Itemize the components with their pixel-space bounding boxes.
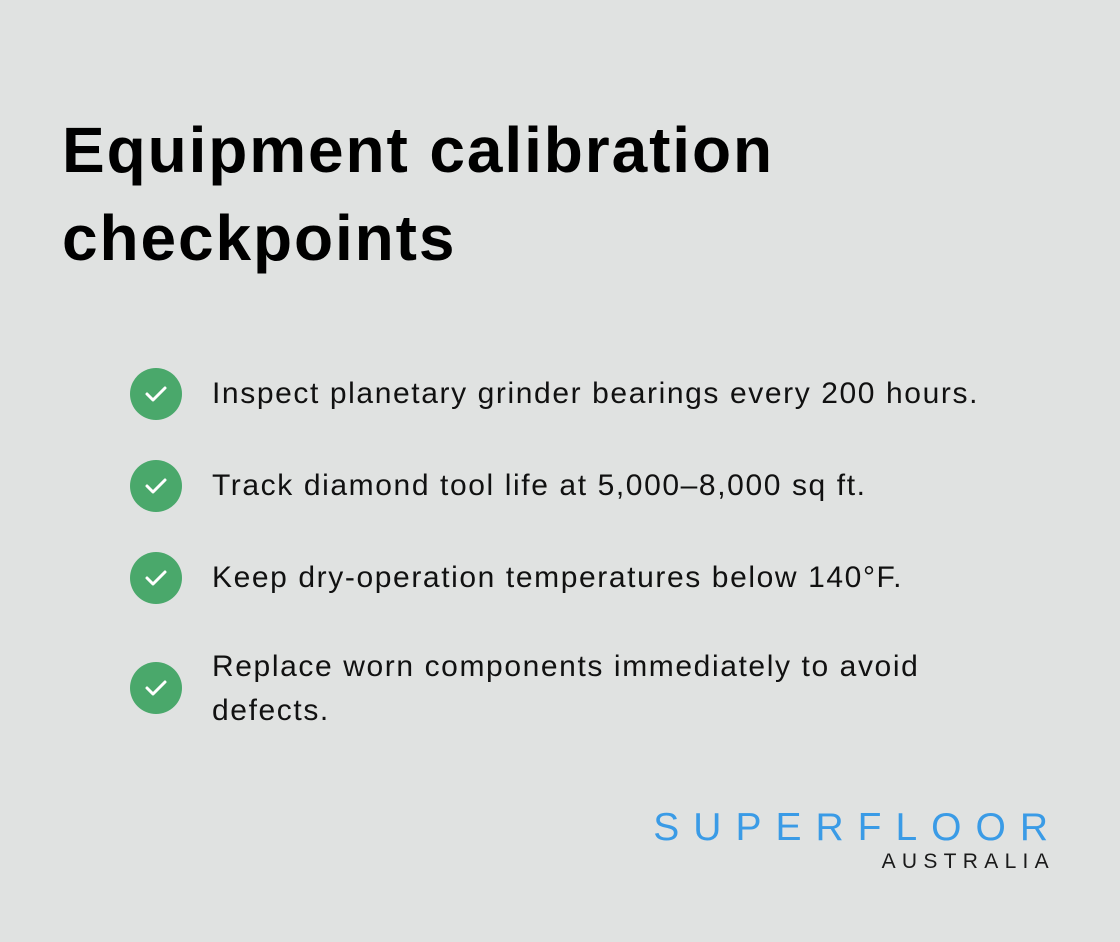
item 1 xyxy=(130,368,979,420)
title xyxy=(62,114,774,274)
logo: SUPERFLOOR: SUPERFLOOR xyxy=(653,806,1062,849)
text xyxy=(212,650,919,727)
text: Track diamond tool life at 5,000–8,000 sq ft. xyxy=(212,469,867,502)
icon: check xyxy=(130,662,182,714)
logo xyxy=(653,806,1062,873)
icon: check xyxy=(130,552,182,604)
icon: check xyxy=(130,460,182,512)
text: Replace worn components immediately to avoid xyxy=(212,650,919,683)
title: checkpoints xyxy=(62,202,456,274)
text: Keep dry-operation temperatures below 140°F. xyxy=(212,561,903,594)
title: Equipment calibration xyxy=(62,114,774,186)
item 4 xyxy=(130,650,919,727)
icon: check xyxy=(130,368,182,420)
logo: AUSTRALIA: AUSTRALIA xyxy=(882,850,1055,873)
text: defects. xyxy=(212,694,330,727)
item 2 xyxy=(130,460,867,512)
text: Inspect planetary grinder bearings every 200 hours. xyxy=(212,377,979,410)
item 3 xyxy=(130,552,903,604)
